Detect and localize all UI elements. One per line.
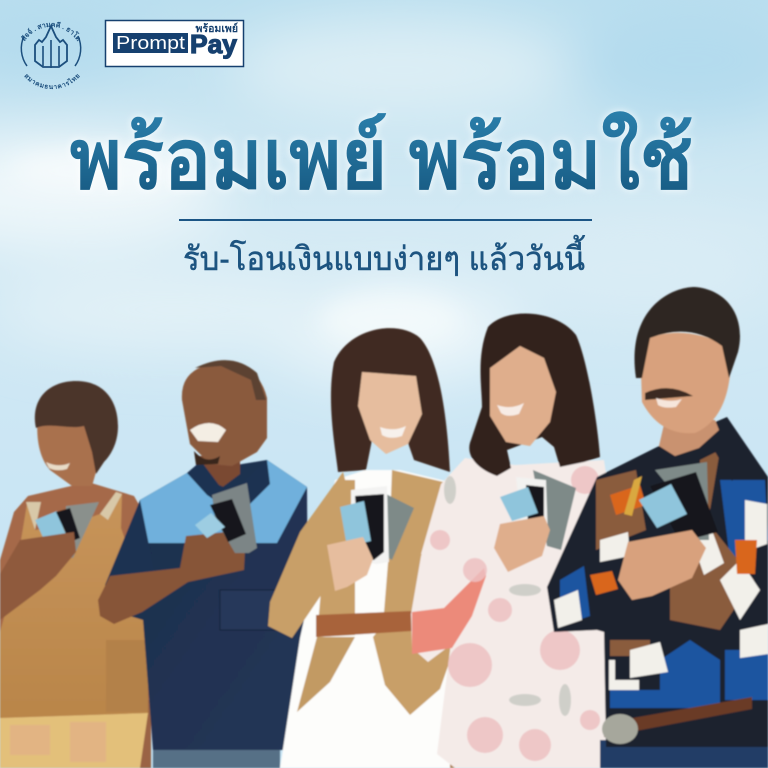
- logo: PromptPay: [106, 20, 244, 66]
- group of five people: [0, 287, 768, 768]
- person 3: young woman in cardigan: [268, 328, 454, 768]
- person 5: man in patterned shirt: [547, 287, 768, 768]
- logo: PromptPay: พร้อมเพย์: [196, 22, 238, 35]
- logo: bankers association seal: สัจจ์ . สามคคี . ธาโต: [21, 22, 80, 42]
- person 1: elderly woman: [0, 381, 151, 768]
- divider under title: [179, 219, 592, 221]
- person 2: man in blue and navy shirt: [98, 360, 308, 768]
- title: พร้อมเพย์ พร้อมใช้: [70, 111, 693, 206]
- logo: bankers association seal: สมาคมธนาคารไทย: [24, 74, 80, 90]
- logo: PromptPay: Pay: [190, 29, 238, 59]
- logo: PromptPay: Prompt: [116, 32, 185, 53]
- subtitle: รับ-โอนเงินแบบง่ายๆ แล้ววันนี้: [183, 235, 586, 277]
- logo: bankers association seal: [20, 22, 82, 90]
- person 4: woman in floral blouse: [411, 314, 612, 768]
- title: พร้อมเพย์ พร้อมใช้: [70, 111, 693, 206]
